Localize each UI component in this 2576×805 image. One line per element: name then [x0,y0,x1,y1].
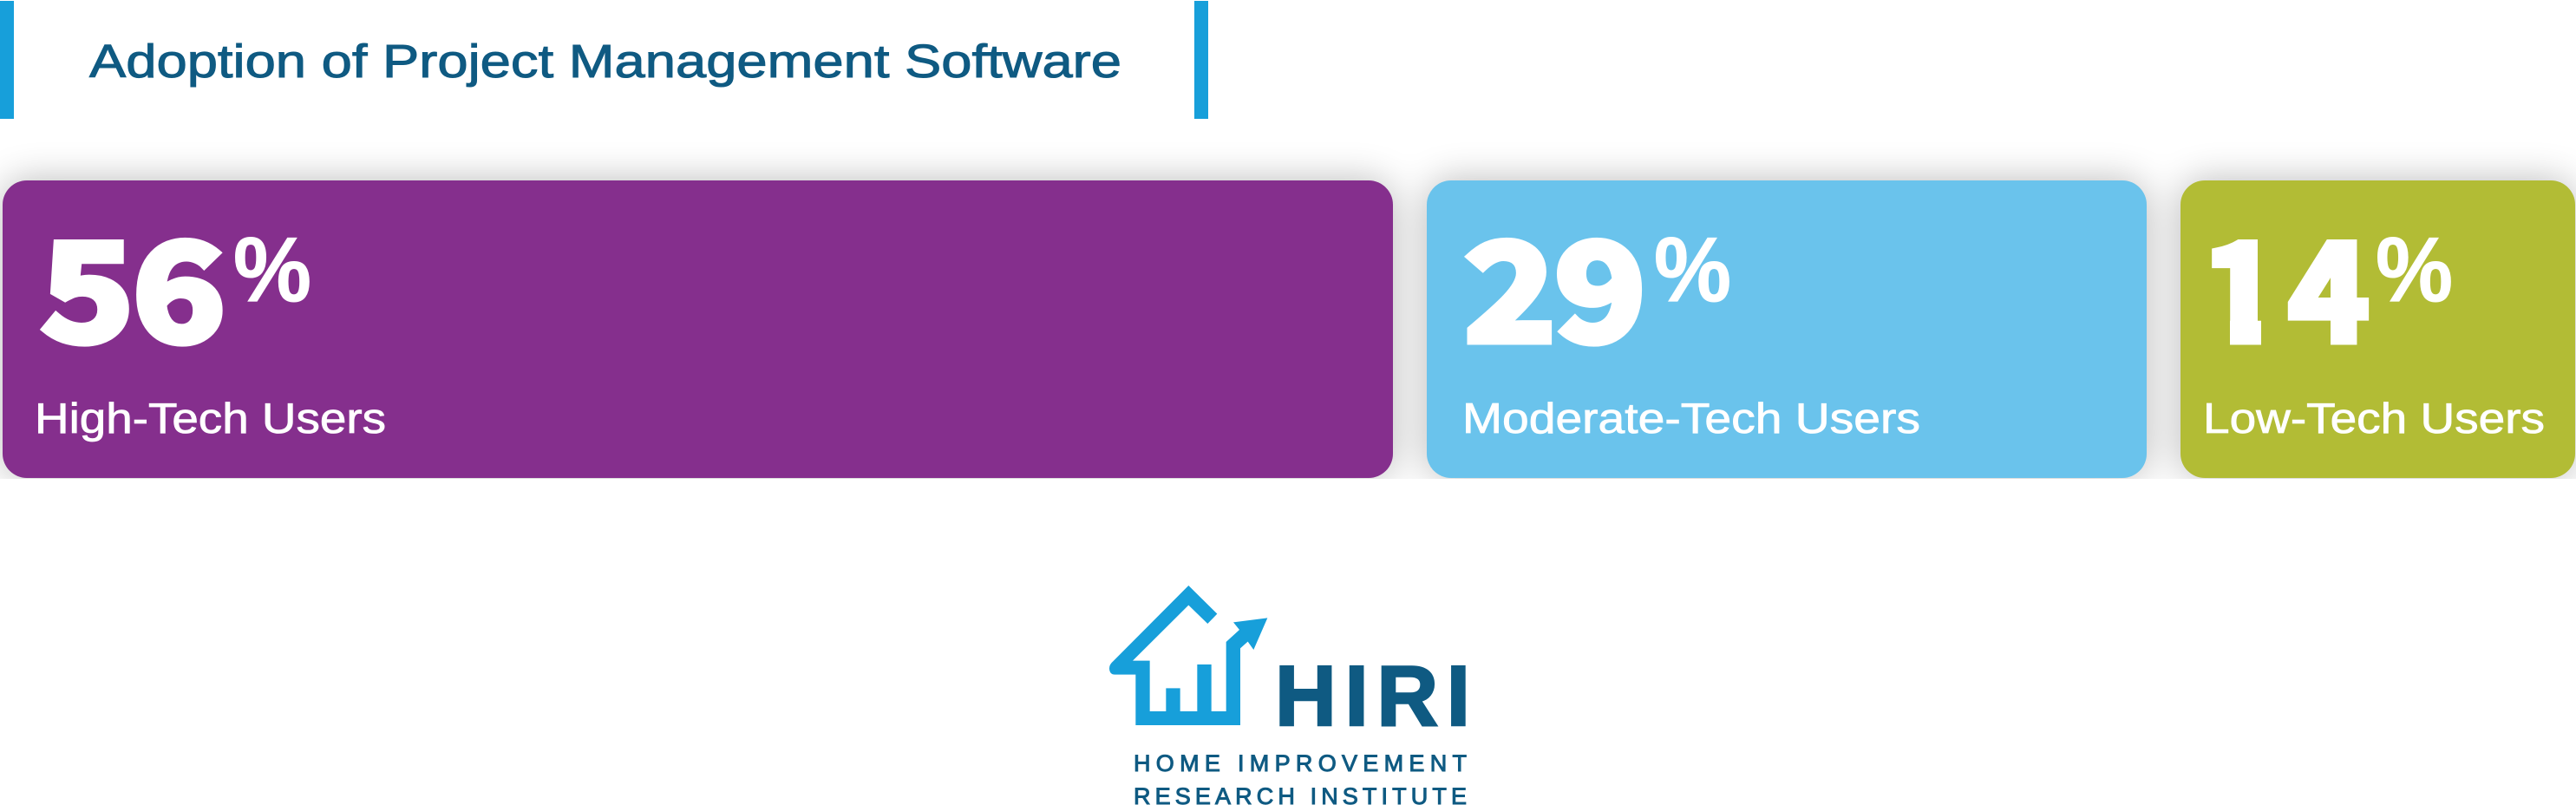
value 29: 29 [1465,184,1645,380]
title banner [0,1,1208,119]
icon: house with rising bars and arrow [1109,586,1267,725]
logo tagline line 1: HOME IMPROVEMENT [1134,750,1467,776]
panel: moderate-tech users 29% [1427,180,2147,478]
title text: Adoption of Project Management Software [89,36,1121,88]
value 14 [2186,184,2369,380]
value 14: 1 [2201,184,2281,380]
percent sign: % [2376,219,2453,321]
panel: high-tech users 56% [3,180,1393,478]
value 56: 56 [42,184,225,380]
logo: HIRI [1109,586,1470,805]
percent sign: % [233,219,311,321]
right accent bar [1194,1,1208,119]
left accent bar [0,1,14,119]
label: Moderate-Tech Users [1462,396,1920,442]
panel: low-tech users 14% [2180,180,2575,478]
label: Low-Tech Users [2203,396,2545,442]
logo wordmark: HIRI [1275,648,1470,743]
percent sign: % [1654,219,1731,321]
label: High-Tech Users [35,396,386,442]
value 14: 4 [2289,184,2369,380]
